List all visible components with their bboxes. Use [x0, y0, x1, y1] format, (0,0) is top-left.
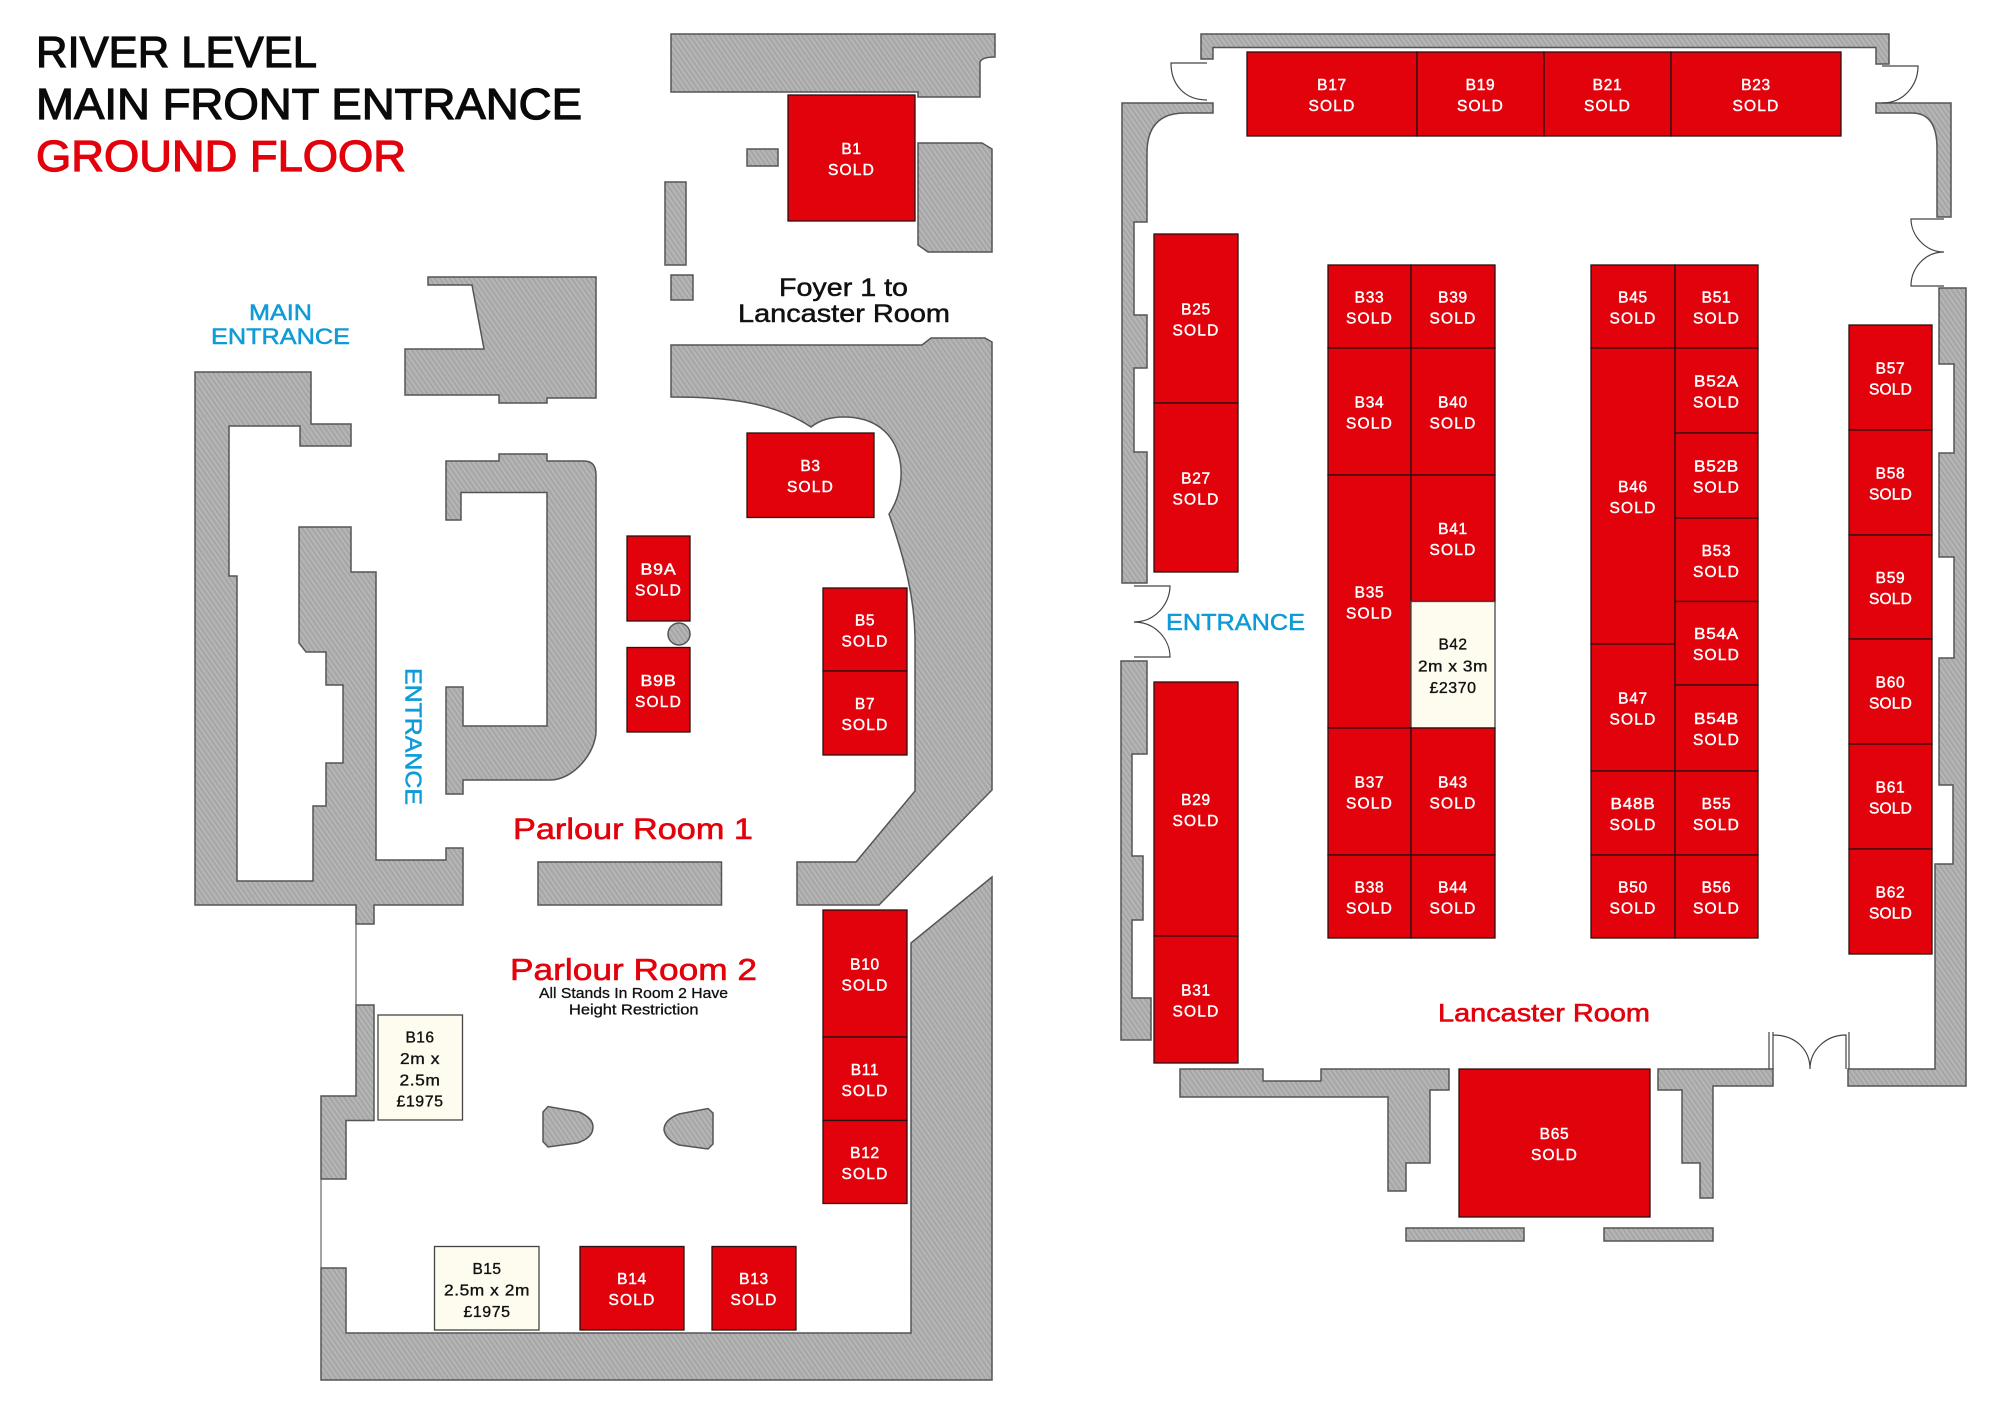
stand B37: SOLD	[1346, 795, 1393, 812]
wall: central U-shaped block	[446, 454, 596, 794]
stand B15 available: £1975	[464, 1304, 510, 1321]
stand B9B: SOLD	[635, 694, 682, 711]
stand B56: B56	[1702, 879, 1731, 896]
stand B46: SOLD	[1609, 500, 1657, 517]
stand B7: B7	[855, 696, 875, 713]
stand B41	[1411, 475, 1495, 602]
stand B34: SOLD	[1346, 415, 1393, 432]
door: west entrance double	[1134, 586, 1170, 657]
stand B52B	[1675, 433, 1758, 518]
stand B25: B25	[1181, 301, 1211, 318]
stand B42 available: 2m x 3m	[1418, 658, 1488, 675]
stand B19: SOLD	[1457, 98, 1504, 115]
stand B40: SOLD	[1429, 415, 1477, 432]
stand B29: B29	[1181, 792, 1211, 809]
stand B50: SOLD	[1609, 900, 1657, 917]
stand B58: SOLD	[1869, 486, 1912, 503]
stand B62	[1849, 849, 1932, 954]
stand B54A	[1675, 602, 1758, 685]
wall: lower bar right	[1604, 1228, 1713, 1241]
stand B61: SOLD	[1869, 800, 1912, 817]
stand B52A	[1675, 348, 1758, 433]
stand B33: B33	[1355, 289, 1384, 306]
wall: foyer top block	[671, 34, 995, 97]
stand B7: SOLD	[841, 717, 889, 734]
stand B65: SOLD	[1531, 1147, 1578, 1164]
stand B17: SOLD	[1308, 98, 1356, 115]
stand B16 available: £1975	[396, 1093, 444, 1110]
column: parlour 2 left	[543, 1106, 593, 1147]
stand B39	[1411, 265, 1495, 348]
stand B53: B53	[1702, 543, 1731, 560]
stand B21: SOLD	[1584, 98, 1631, 115]
stand B14: SOLD	[608, 1292, 656, 1309]
stand B29: SOLD	[1172, 813, 1220, 830]
stand B9A: SOLD	[635, 582, 682, 599]
stand B45: SOLD	[1609, 310, 1657, 327]
stand B58	[1849, 430, 1932, 535]
stand B31: B31	[1181, 982, 1211, 999]
stand B55	[1675, 771, 1758, 855]
stand B57	[1849, 325, 1932, 430]
stand B46: B46	[1618, 479, 1648, 496]
panel: right hall walls and doors	[1121, 34, 1966, 1241]
wall: south-west with B65 recess	[1180, 1069, 1449, 1191]
stand B56: SOLD	[1693, 900, 1740, 917]
stand B54A: B54A	[1694, 626, 1739, 643]
title: GROUND FLOOR	[36, 132, 406, 181]
stand B1: SOLD	[828, 162, 875, 179]
stand B3: SOLD	[787, 479, 834, 496]
stand B59	[1849, 535, 1932, 639]
stand B13: SOLD	[730, 1292, 778, 1309]
stand B57: B57	[1876, 360, 1905, 377]
wall: small foyer pillar	[671, 275, 693, 300]
stand B65	[1459, 1069, 1650, 1217]
stand B5	[823, 588, 907, 671]
stand B62: SOLD	[1869, 905, 1912, 922]
column: parlour 2 right	[664, 1108, 713, 1149]
stand B13: B13	[739, 1271, 769, 1288]
door: top left	[1171, 63, 1207, 100]
stand B41: B41	[1438, 521, 1468, 538]
stand B27	[1154, 403, 1238, 572]
stand B60: B60	[1876, 674, 1905, 691]
wall: parlour 2 east and south wall	[321, 877, 992, 1380]
stand B10: B10	[850, 956, 880, 973]
stand B3	[747, 433, 874, 518]
wall: upper right	[1876, 103, 1951, 217]
title: RIVER LEVEL	[36, 28, 317, 77]
stand B53	[1675, 518, 1758, 602]
stand B14: B14	[617, 1271, 647, 1288]
label: Parlour Room 2: Parlour Room 2	[510, 952, 757, 987]
stand B11	[823, 1037, 907, 1120]
label: Foyer 1 to Lancaster Room	[738, 274, 950, 328]
stand B57: SOLD	[1869, 381, 1912, 398]
stand B17	[1247, 52, 1417, 136]
stand B54B	[1675, 685, 1758, 771]
label: Lancaster Room: Lancaster Room	[1438, 1000, 1650, 1028]
stand B58: B58	[1876, 465, 1905, 482]
panel: right hall stands	[1154, 52, 1932, 1217]
stand B42 available: B42	[1438, 636, 1468, 653]
stand B55: B55	[1702, 796, 1731, 813]
door: east double	[1911, 219, 1944, 286]
stand B31	[1154, 936, 1238, 1063]
title: MAIN FRONT ENTRANCE	[36, 80, 582, 129]
stand B47	[1591, 644, 1675, 771]
stand B52B: B52B	[1694, 458, 1739, 475]
stand B37	[1328, 728, 1411, 855]
label: vertical entrance: ENTRANCE	[400, 668, 426, 805]
label: right hall entrance: ENTRANCE	[1166, 609, 1305, 635]
stand B15 available: B15	[472, 1261, 502, 1278]
stand B33	[1328, 265, 1411, 348]
stand B38	[1328, 855, 1411, 938]
stand B35: SOLD	[1346, 605, 1393, 622]
stand B16 available	[378, 1015, 462, 1120]
stand B61	[1849, 744, 1932, 849]
wall: bar between parlour rooms	[538, 862, 722, 905]
stand B54A: SOLD	[1693, 647, 1740, 664]
stand B3: B3	[800, 458, 821, 475]
stand B59: SOLD	[1869, 591, 1912, 608]
stand B43	[1411, 728, 1495, 855]
stand B56	[1675, 855, 1758, 938]
stand B34	[1328, 348, 1411, 475]
stand B25: SOLD	[1172, 322, 1220, 339]
stand B11: SOLD	[841, 1083, 889, 1100]
stand B19	[1417, 52, 1544, 136]
stand B25	[1154, 234, 1238, 403]
stand B14	[580, 1246, 684, 1330]
stand B27: B27	[1181, 470, 1211, 487]
wall: vertical foyer bar	[665, 182, 686, 265]
stand B45: B45	[1618, 289, 1648, 306]
stand B60	[1849, 639, 1932, 744]
stand B35: B35	[1355, 584, 1384, 601]
wall: east and south-east	[1848, 288, 1966, 1086]
stand B44	[1411, 855, 1495, 938]
stand B50	[1591, 855, 1675, 938]
stand B59: B59	[1876, 570, 1905, 587]
stand B65: B65	[1540, 1126, 1569, 1143]
stand B41: SOLD	[1429, 542, 1477, 559]
door: south-east double	[1769, 1032, 1849, 1069]
stand B37: B37	[1355, 774, 1384, 791]
stand B21: B21	[1593, 77, 1622, 94]
stand B9A	[627, 536, 690, 621]
panel: left floor plan stands	[378, 95, 915, 1330]
stand B43: SOLD	[1429, 795, 1477, 812]
stand B23: B23	[1741, 77, 1771, 94]
stand B44: B44	[1438, 879, 1468, 896]
stand B12	[823, 1120, 907, 1204]
stand B23: SOLD	[1732, 98, 1780, 115]
stand B50: B50	[1618, 879, 1648, 896]
stand B9A: B9A	[640, 561, 676, 578]
stand B16 available: 2m x	[400, 1051, 440, 1068]
stand B33: SOLD	[1346, 310, 1393, 327]
label: main entrance	[211, 300, 350, 349]
stand B52A: B52A	[1694, 373, 1739, 390]
stand B42 available: £2370	[1430, 680, 1476, 697]
stand B48B	[1591, 771, 1675, 855]
stand B54B: B54B	[1694, 711, 1739, 728]
label: Parlour Room 1: Parlour Room 1	[513, 813, 753, 846]
stand B60: SOLD	[1869, 695, 1912, 712]
label: Foyer 1 to Lancaster Room: Lancaster Room	[738, 300, 950, 328]
stand B10	[823, 910, 907, 1037]
note: height restriction: All Stands In Room 2 Have	[539, 986, 728, 1002]
wall: lower left	[1121, 661, 1151, 1040]
stand B12: SOLD	[841, 1166, 889, 1183]
stand B17: B17	[1317, 77, 1347, 94]
stand B61: B61	[1876, 779, 1905, 796]
door: top right	[1882, 66, 1918, 103]
stand B48B: SOLD	[1609, 817, 1657, 834]
stand B38: B38	[1355, 879, 1384, 896]
stand B15 available: 2.5m x 2m	[444, 1282, 530, 1299]
stand B16 available: B16	[405, 1029, 435, 1046]
stand B47: B47	[1618, 690, 1648, 707]
stand B34: B34	[1355, 394, 1384, 411]
stand B39: B39	[1438, 289, 1468, 306]
stand B23	[1671, 52, 1841, 136]
stand B12: B12	[850, 1145, 880, 1162]
label: main entrance: ENTRANCE	[211, 324, 350, 349]
stand B46	[1591, 348, 1675, 644]
wall: block right of main entrance	[405, 277, 596, 403]
stand B19: B19	[1466, 77, 1495, 94]
stand B39: SOLD	[1429, 310, 1477, 327]
wall: block right of B1	[918, 143, 992, 252]
stand B31: SOLD	[1172, 1003, 1220, 1020]
stand B38: SOLD	[1346, 900, 1393, 917]
stand B45	[1591, 265, 1675, 348]
note: height restriction	[539, 986, 728, 1018]
stand B44: SOLD	[1429, 900, 1477, 917]
label: main entrance: MAIN	[249, 300, 312, 325]
wall: upper left	[1122, 103, 1213, 583]
column: round pillar between B9A and B9B	[668, 623, 690, 645]
stand B52B: SOLD	[1693, 479, 1740, 496]
stand B35	[1328, 475, 1411, 728]
stand B43: B43	[1438, 774, 1468, 791]
stand B51: SOLD	[1693, 310, 1740, 327]
wall: small pillar beside B1	[747, 149, 778, 166]
title	[36, 28, 582, 181]
label: Foyer 1 to Lancaster Room: Foyer 1 to	[779, 274, 908, 302]
stand B42 available	[1411, 602, 1495, 728]
stand B51	[1675, 265, 1758, 348]
stand B52A: SOLD	[1693, 394, 1740, 411]
wall: thin west partition lines	[321, 924, 356, 1268]
stand B1	[788, 95, 915, 221]
stand B9B: B9B	[640, 673, 676, 690]
stand B54B: SOLD	[1693, 732, 1740, 749]
stand B53: SOLD	[1693, 564, 1740, 581]
wall: parlour 2 west wall piece	[321, 1005, 374, 1179]
stand B29	[1154, 682, 1238, 936]
stand B51: B51	[1702, 289, 1731, 306]
stand B1: B1	[841, 141, 862, 158]
stand B11: B11	[851, 1062, 879, 1079]
stand B27: SOLD	[1172, 491, 1220, 508]
stand B5: SOLD	[841, 633, 889, 650]
stand B47: SOLD	[1609, 711, 1657, 728]
wall: south with B65 recess right	[1658, 1069, 1773, 1198]
stand B55: SOLD	[1693, 817, 1740, 834]
stand B40	[1411, 348, 1495, 475]
stand B15 available	[434, 1246, 539, 1330]
stand B7	[823, 671, 907, 755]
note: height restriction: Height Restriction	[569, 1002, 698, 1018]
wall: top	[1201, 34, 1889, 64]
panel: left floor plan walls	[195, 34, 995, 1380]
stand B21	[1544, 52, 1671, 136]
stand B10: SOLD	[841, 977, 889, 994]
stand B16 available: 2.5m	[400, 1072, 440, 1089]
stand B5: B5	[855, 612, 875, 629]
stand B62: B62	[1876, 884, 1905, 901]
wall: west entrance corridor wall	[195, 372, 463, 924]
stand B48B: B48B	[1610, 796, 1656, 813]
stand B40: B40	[1438, 394, 1468, 411]
wall: lower bar left	[1406, 1228, 1524, 1241]
stand B13	[712, 1246, 796, 1330]
wall: foyer and parlour east wall	[671, 338, 992, 905]
stand B9B	[627, 648, 690, 732]
